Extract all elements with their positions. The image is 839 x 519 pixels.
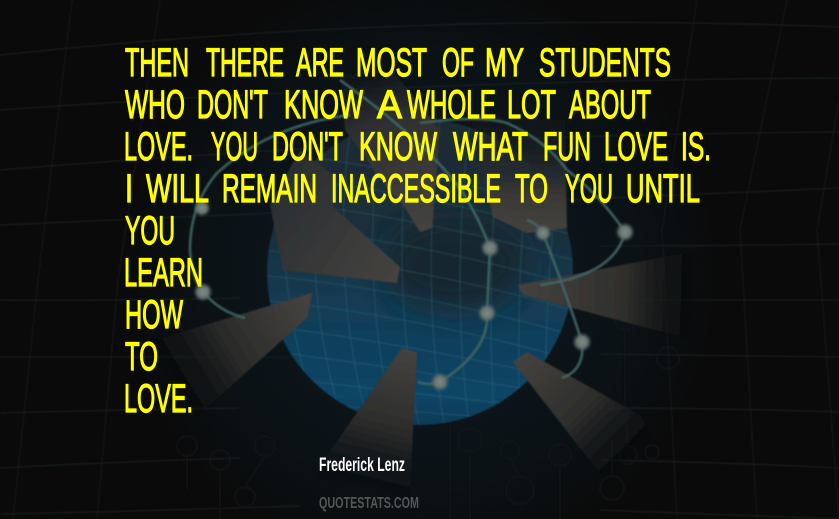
quote text: REMAIN: [222, 167, 317, 211]
quote text: LOT: [507, 83, 556, 127]
quote text: ABOUT: [569, 83, 651, 127]
author: Frederick Lenz: [319, 455, 405, 476]
watermark: QUOTESTATS.COM: [319, 495, 419, 512]
quote text: YOU: [565, 167, 613, 211]
circuit pattern: [177, 310, 679, 519]
quote text: IS.: [681, 125, 711, 169]
quote text: UNTIL: [626, 167, 700, 211]
quote text: LOVE.: [124, 377, 193, 421]
quote text: LOVE.: [124, 125, 193, 169]
quote text: WHO: [125, 83, 185, 127]
quote text: DON'T: [197, 83, 268, 127]
ray: right: [518, 250, 705, 343]
quote text: ARE: [296, 41, 344, 85]
quote text: THERE: [206, 41, 284, 85]
quote text: HOW: [125, 293, 183, 337]
connection curves: [190, 80, 625, 384]
quote text: MOST: [356, 41, 427, 85]
globe grid lines: [260, 120, 590, 430]
ray: left: [270, 150, 400, 283]
quote text: DON'T: [272, 125, 343, 169]
quote text: YOU: [211, 125, 258, 169]
network nodes: [193, 199, 635, 392]
ray: lower right: [513, 352, 665, 480]
quote text: KNOW: [359, 125, 437, 169]
ray: upper right: [470, 115, 567, 233]
quote text: TO: [125, 335, 158, 379]
light rays: [145, 70, 705, 510]
quote text: MY: [485, 41, 524, 85]
globe centre shadow: [385, 220, 525, 310]
globe: [260, 119, 590, 430]
ray: bottom: [310, 348, 417, 510]
quote text: YOU: [125, 209, 175, 253]
quote text: INACCESSIBLE: [331, 167, 501, 211]
quote text: OF: [442, 41, 474, 85]
quote text: STUDENTS: [539, 41, 671, 85]
quote text: KNOW: [284, 83, 363, 127]
ray: lower left: [145, 293, 312, 418]
quote text: A: [377, 83, 402, 127]
quote text: TO: [515, 167, 548, 211]
quote text: LEARN: [124, 251, 203, 295]
quote text: THEN: [125, 41, 189, 85]
quote text: [124, 41, 711, 421]
quote text: WHAT: [453, 125, 528, 169]
quote text: WHOLE: [407, 83, 496, 127]
quote text: LOVE: [604, 125, 668, 169]
quote text: I: [125, 167, 133, 211]
quote text: FUN: [543, 125, 591, 169]
quote text: WILL: [146, 167, 209, 211]
ray: upper: [340, 70, 440, 232]
